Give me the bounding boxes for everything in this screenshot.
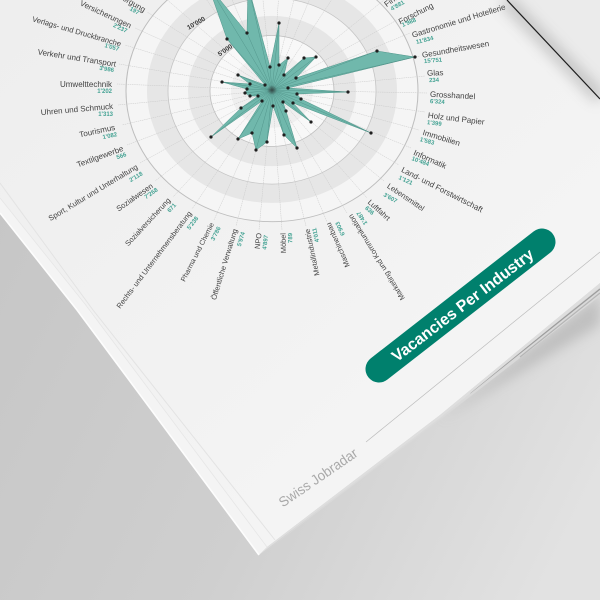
sheet stack edge	[262, 283, 600, 554]
label: Versicherungen: 2'237	[112, 23, 128, 35]
label: Öffentliche Verwaltung: Öffentliche Verwaltung	[209, 228, 239, 301]
radar polygon	[208, 0, 415, 150]
label: Öffentliche Verwaltung: 5'974	[237, 231, 247, 247]
brochure shadow	[440, 294, 600, 420]
label: Holz und Papier: 1'399	[427, 120, 443, 128]
label: Immobilien: 1'583	[419, 137, 435, 147]
label: Möbel	[279, 232, 294, 253]
label: Sozialversicherung: Sozialversicherung	[123, 196, 172, 248]
label: Pharma und Chemie: 3'786	[211, 226, 223, 242]
label: Land- und Forstwirtschaft: Land- und Forstwirtschaft	[400, 165, 485, 215]
label: NPO: NPO	[253, 232, 264, 249]
ring label: 5'000: 5'000	[217, 43, 234, 58]
label: Maschinenbau: 6'903	[335, 220, 347, 236]
label: Luftfahrt: Luftfahrt	[366, 198, 392, 223]
label: Sport, Kultur und Unterhaltung: Sport, Kultur und Unterhaltung	[47, 162, 139, 223]
label: Tourismus: 1'082	[102, 132, 118, 141]
label: Glas	[427, 68, 444, 84]
facing page	[505, 0, 600, 99]
label: Forschung: 1'988	[401, 17, 418, 29]
label: Metallindustrie: 4'011	[312, 227, 321, 243]
label: Rechts- und Unternehmensberatung: Rechts- und Unternehmensberatung	[115, 209, 194, 310]
label: NPO: 4'897	[262, 234, 270, 250]
label: Rechts- und Unternehmensberatung: 5'238	[187, 215, 201, 231]
label: Möbel: Möbel	[279, 233, 288, 253]
title pill: Vacancies Per Industry	[389, 246, 537, 366]
label: Uhren und Schmuck: Uhren und Schmuck	[40, 102, 114, 117]
label: Verkehr und Transport: 3'986	[99, 66, 115, 74]
label: Maschinenbau: Maschinenbau	[324, 221, 352, 269]
label: Pharma und Chemie: Pharma und Chemie	[179, 221, 216, 283]
label: Ver- und Entsorgung: 197	[128, 6, 141, 17]
label: Glas: 234	[429, 78, 440, 84]
label: Textilgewerbe: Textilgewerbe	[76, 144, 125, 169]
label: Immobilien: Immobilien	[422, 128, 461, 148]
label: Tourismus: Tourismus	[78, 123, 116, 139]
label: Gastronomie und Hotellerie: 11'834	[416, 36, 435, 46]
ring label: 10'000: 10'000	[186, 16, 207, 32]
label: Verkehr und Transport: Verkehr und Transport	[37, 47, 117, 69]
label: Grosshandel: Grosshandel	[430, 90, 476, 101]
label: Verlags- und Druckbranche: Verlags- und Druckbranche	[31, 14, 122, 48]
label: Möbel: 789	[288, 232, 294, 243]
label: Umwelttechnik	[60, 80, 113, 95]
label: Lebensmittel: Lebensmittel	[385, 181, 426, 213]
label: Sozialversicherung: 671	[167, 202, 178, 214]
label: Umwelttechnik: 1'202	[97, 89, 113, 95]
label: Land- und Forstwirtschaft: 1'121	[397, 175, 414, 187]
label: Marketing und Kommunikation: Marketing und Kommunikation	[346, 213, 407, 302]
radar chart grid	[117, 0, 427, 230]
label: Holz und Papier: Holz und Papier	[427, 111, 485, 127]
label: Sozialwesen: 7'268	[144, 187, 160, 201]
label: Gesundheitswesen: 15'751	[424, 57, 443, 65]
label: Textilgewerbe: 566	[116, 152, 128, 161]
label: Sozialwesen: Sozialwesen	[115, 181, 155, 213]
label: Marketing und Kommunikation: 1'487	[356, 209, 369, 226]
label: Finanzen: 4'881	[390, 0, 406, 13]
label: Informatik: Informatik	[412, 148, 449, 171]
label: Verlags- und Druckbranche: 1'057	[104, 43, 120, 53]
footer line	[366, 252, 600, 442]
label: Uhren und Schmuck: 1'313	[98, 112, 114, 118]
label: Luftfahrt: 636	[363, 206, 375, 217]
label: Lebensmittel: 3'607	[382, 192, 398, 205]
label: Umwelttechnik: Umwelttechnik	[60, 80, 113, 89]
radar data points	[209, 21, 417, 152]
label: Grosshandel: 6'324	[430, 99, 446, 106]
label: NPO	[253, 232, 270, 250]
label: Gastronomie und Hotellerie: Gastronomie und Hotellerie	[411, 2, 507, 40]
label: Forschung: Forschung	[397, 1, 435, 26]
label: Sport, Kultur und Unterhaltung: 2'118	[129, 171, 145, 184]
label: Metallindustrie: Metallindustrie	[303, 228, 321, 277]
footer text: Swiss Jobradar: Swiss Jobradar	[276, 445, 361, 510]
label: Informatik: 10'484	[411, 156, 430, 168]
label: Glas: Glas	[427, 68, 444, 78]
label: Gesundheitswesen: Gesundheitswesen	[421, 39, 490, 60]
